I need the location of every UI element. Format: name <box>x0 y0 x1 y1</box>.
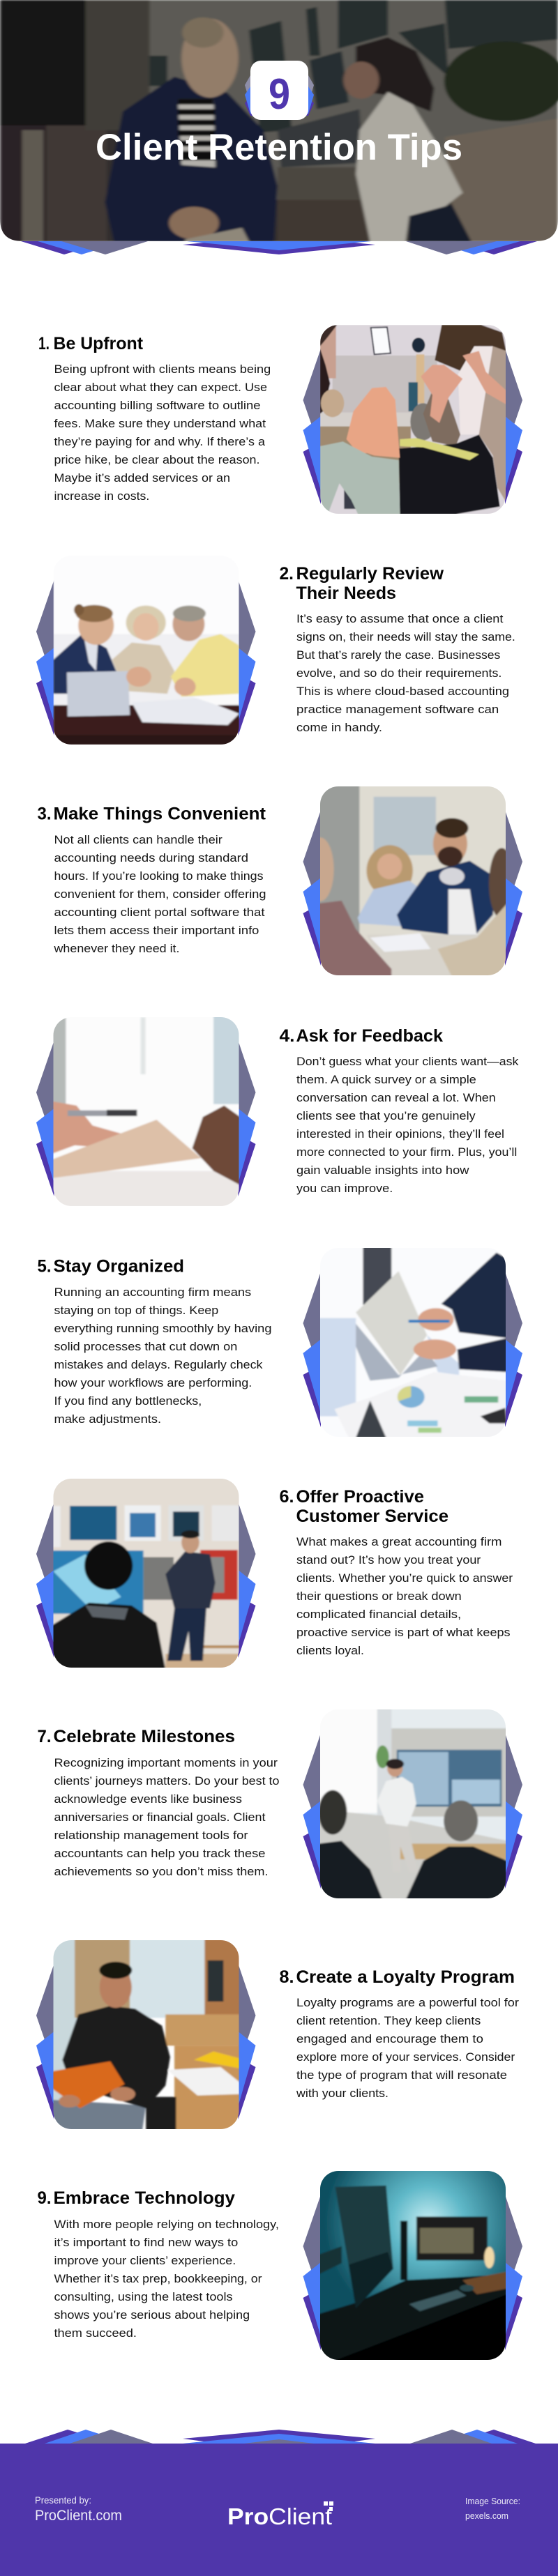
text: tip 5 body: staying on top of things. Keep <box>54 1304 218 1317</box>
decoration: hexagon behind photo 5 <box>303 1272 522 1427</box>
heading: tip 2: 2. <box>279 564 294 584</box>
text: tip 2 body: evolve, and so do their requirements. <box>296 666 502 680</box>
text: tip 9 body: Whether it’s tax prep, bookkeeping, or <box>54 2272 262 2285</box>
decoration: hexagon behind photo 7 <box>303 1733 522 1889</box>
text: tip 4 body: clients see that you’re genuinely <box>296 1109 476 1122</box>
text: tip 3 body <box>53 833 266 955</box>
text: tip 4 body: more connected to your firm. Plus, you’ll <box>296 1145 517 1159</box>
text: tip 8 body: with your clients. <box>296 2087 389 2100</box>
text: tip 1 body: fees. Make sure they understand what <box>54 417 266 430</box>
heading: tip 6 <box>279 1487 448 1526</box>
photo: advisor with couple at table <box>53 580 239 745</box>
text: tip 5 body <box>54 1286 272 1426</box>
heading: tip 4: Ask for Feedback <box>296 1026 443 1046</box>
panel: tip 2 <box>36 554 515 745</box>
text: tip 5 body: solid processes that cut down on <box>54 1340 237 1353</box>
text: tip 2 body: It’s easy to assume that once a client <box>296 612 504 625</box>
text: tip 4 body <box>296 1055 519 1195</box>
decoration: chevrons under hero <box>21 241 537 254</box>
panel: tip 5 <box>38 1247 522 1438</box>
heading: tip 3: 3. <box>38 805 52 824</box>
text: tip 5 body: Running an accounting firm means <box>54 1286 251 1299</box>
text: tip 3 body: lets them access their important info <box>54 924 259 937</box>
text: tip 9 body: consulting, using the latest tools <box>54 2290 233 2303</box>
photo: smiling man with orange folder <box>52 1938 240 2131</box>
decoration: hexagon behind photo 9 <box>303 2195 522 2350</box>
text: tip 7 body: achievements so you don’t miss them. <box>54 1865 268 1878</box>
text: tip 5 body: If you find any bottlenecks, <box>54 1394 202 1408</box>
heading: tip 5: Stay Organized <box>53 1256 184 1276</box>
logo: ProClient: ProClient <box>227 2503 332 2529</box>
heading: tip 2 <box>279 564 444 603</box>
heading: tip 2: Their Needs <box>296 584 396 603</box>
photo: dual monitor desk with teal glow <box>319 2169 507 2362</box>
text: tip 8 body: client retention. They keep clients <box>296 2014 481 2027</box>
panel: tip 8 <box>36 1938 519 2131</box>
photo: hands over document with pen <box>52 1016 240 1207</box>
text: tip 7 body: accountants can help you track these <box>54 1847 265 1860</box>
heading: tip 9: Embrace Technology <box>53 2188 235 2208</box>
decoration: hexagon behind photo 1 <box>303 349 522 504</box>
text: tip 2 body <box>296 612 515 734</box>
text: tip 1 body: accounting billing software to outline <box>54 399 261 412</box>
text: tip 5 body: everything running smoothly by having <box>54 1322 272 1335</box>
text: tip 5 body: how your workflows are performing. <box>54 1376 252 1389</box>
heading: tip 5: 5. <box>38 1256 52 1276</box>
decoration: hexagon behind photo 2 <box>36 580 255 736</box>
text: tip 3 body: convenient for them, consider offering <box>54 887 266 901</box>
photo: presenter in gallery room <box>52 1477 240 1669</box>
text: tip 1 body: Being upfront with clients means being <box>54 363 271 376</box>
text: tip 2 body: This is where cloud-based accounting <box>296 685 509 698</box>
panel: tip 1 <box>38 325 522 515</box>
photo: hands gesturing in meeting <box>320 325 506 515</box>
text: tip 3 body: accounting client portal software that <box>54 906 265 919</box>
text: tip 4 body: you can improve. <box>296 1182 393 1195</box>
heading: tip 6: 6. <box>279 1487 294 1507</box>
text: tip 9 body: improve your clients’ experience. <box>54 2254 236 2267</box>
badge: number 9: 9 <box>269 70 290 119</box>
panel: tip 9 <box>38 2169 522 2362</box>
decoration: hexagon behind photo 8 <box>36 1964 255 2119</box>
text: tip 2 body: signs on, their needs will stay the same. <box>296 630 515 643</box>
text: tip 3 body: whenever they need it. <box>53 942 180 955</box>
text: tip 3 body: accounting needs during standard <box>54 851 248 864</box>
badge: number 9 <box>245 61 314 120</box>
text: tip 6 body: What makes a great accounting firm <box>296 1535 502 1548</box>
text: tip 3 body: hours. If you’re looking to make things <box>54 869 263 883</box>
text: tip 9 body: it’s important to find new ways to <box>54 2236 238 2249</box>
text: tip 4 body: interested in their opinions, they’ll feel <box>296 1127 504 1141</box>
text: tip 7 body: acknowledge events like business <box>54 1792 242 1806</box>
text: tip 3 body: Not all clients can handle their <box>54 833 223 846</box>
panel: tip 4 <box>36 1016 519 1207</box>
text: tip 4 body: them. A quick survey or a simple <box>296 1073 476 1086</box>
footer band <box>0 2444 558 2576</box>
text: presented by: Presented by: <box>35 2494 91 2506</box>
text: tip 1 body: increase in costs. <box>54 489 149 503</box>
text: tip 9 body: shows you’re serious about helping <box>54 2308 250 2322</box>
text: tip 6 body: clients loyal. <box>296 1644 364 1657</box>
text: tip 4 body: gain valuable insights into how <box>296 1164 469 1177</box>
decoration: chevrons above footer <box>25 2430 536 2444</box>
text: tip 6 body: proactive service is part of what keeps <box>296 1626 511 1639</box>
text: tip 5 body: mistakes and delays. Regularly check <box>54 1358 263 1371</box>
text: presented by: ProClient.com <box>35 2508 122 2524</box>
text: tip 1 body: they’re paying for and why. If there’s a <box>54 435 266 448</box>
text: tip 8 body: explore more of your services. Consider <box>296 2050 515 2064</box>
decoration: hexagon behind photo 4 <box>36 1041 255 1196</box>
text: tip 8 body: the type of program that will resonate <box>296 2068 507 2082</box>
photo: team meeting laughing <box>320 786 506 975</box>
photo: laptop and charts on desk <box>319 1247 507 1438</box>
heading: tip 4: 4. <box>279 1026 294 1046</box>
text: tip 1 body: price hike, be clear about the reason. <box>54 453 259 466</box>
heading: tip 7: Celebrate Milestones <box>53 1727 235 1746</box>
text: tip 7 body: clients’ journeys matters. Do your best to <box>54 1774 279 1788</box>
heading: tip 9: 9. <box>38 2188 52 2208</box>
text: image source <box>465 2496 520 2521</box>
text: presented by <box>35 2494 122 2524</box>
text: tip 9 body: them succeed. <box>54 2326 137 2340</box>
text: tip 6 body <box>296 1535 513 1657</box>
text: image source: Image Source: <box>465 2496 520 2506</box>
text: image source: pexels.com <box>465 2510 508 2521</box>
text: tip 7 body: Recognizing important moments in your <box>54 1756 278 1769</box>
heading: tip 6: Offer Proactive <box>296 1487 424 1507</box>
panel: tip 7 <box>38 1707 522 1900</box>
text: tip 6 body: their questions or break down <box>296 1590 462 1603</box>
text: tip 7 body <box>54 1756 279 1878</box>
text: tip 8 body: engaged and encourage them to <box>296 2032 483 2045</box>
text: tip 6 body: clients. Whether you’re quick to answer <box>296 1571 513 1585</box>
heading: tip 3: Make Things Convenient <box>53 805 266 824</box>
decoration: hexagon behind photo 6 <box>36 1502 255 1658</box>
text: tip 7 body: anniversaries or financial goals. Client <box>54 1811 266 1824</box>
text: tip 9 body: With more people relying on technology, <box>54 2218 279 2231</box>
heading: tip 1: Be Upfront <box>53 334 144 353</box>
text: tip 9 body <box>54 2218 279 2340</box>
heading: tip 8: Create a Loyalty Program <box>296 1967 515 1987</box>
text: tip 6 body: complicated financial details, <box>296 1608 461 1621</box>
heading: tip 6: Customer Service <box>296 1507 448 1526</box>
text: tip 8 body: Loyalty programs are a powerful tool for <box>296 1996 519 2009</box>
panel: tip 3 <box>38 786 522 977</box>
heading: tip 1: 1. <box>38 334 50 353</box>
text: tip 2 body: come in handy. <box>296 721 382 734</box>
text: tip 8 body <box>296 1996 519 2100</box>
title: Client Retention Tips <box>96 127 462 168</box>
text: tip 1 body <box>54 363 271 503</box>
heading: tip 7: 7. <box>38 1727 52 1746</box>
photo: woman presenting data screen <box>319 1707 507 1900</box>
heading: tip 8: 8. <box>279 1967 294 1987</box>
text: tip 4 body: Don’t guess what your clients want—ask <box>296 1055 519 1068</box>
text: tip 7 body: relationship management tools for <box>54 1829 248 1842</box>
hero photo banner <box>0 0 558 242</box>
text: tip 1 body: clear about what they can expect. Use <box>54 381 267 394</box>
decoration: hexagon behind photo 3 <box>303 810 522 966</box>
text: tip 2 body: But that’s rarely the case. Businesses <box>296 648 500 662</box>
panel: tip 6 <box>36 1477 513 1669</box>
heading: tip 2: Regularly Review <box>296 564 444 584</box>
text: tip 4 body: conversation can reveal a lot. When <box>296 1091 496 1104</box>
text: tip 6 body: stand out? It’s how you treat your <box>296 1553 481 1567</box>
text: tip 2 body: practice management software can <box>296 703 499 716</box>
text: tip 5 body: make adjustments. <box>54 1412 161 1426</box>
text: tip 1 body: Maybe it’s added services or an <box>54 471 230 485</box>
